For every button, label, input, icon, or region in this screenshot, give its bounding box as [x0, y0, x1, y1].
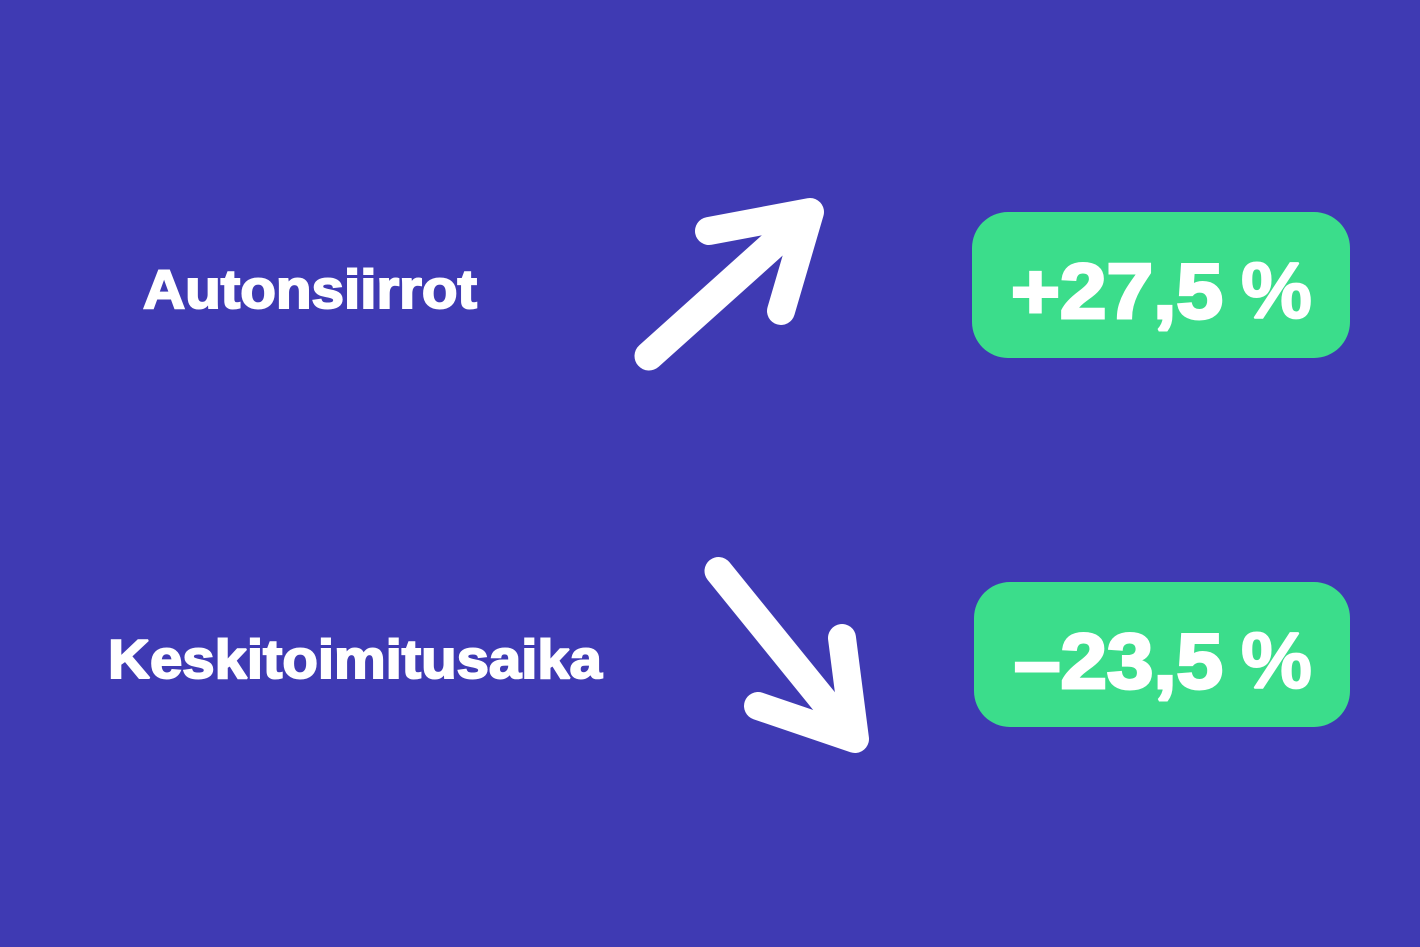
value: +27,5 %: % [1241, 246, 1312, 335]
value badge: up [972, 212, 1350, 358]
label: Autonsiirrot: Autonsiirrot [143, 258, 477, 320]
value badge: down [974, 582, 1350, 727]
value: –23,5 %: –23,5 [1014, 617, 1223, 705]
value: +27,5 %: +27,5 [1011, 247, 1223, 335]
badge background: down [974, 582, 1350, 727]
badge background: up [972, 212, 1350, 358]
arrow: down [718, 571, 855, 739]
value: –23,5 % [1014, 616, 1312, 705]
label: Keskitoimitusaika: Keskitoimitusaika [108, 628, 602, 690]
value: –23,5 %: % [1241, 616, 1312, 705]
arrow: up [649, 212, 810, 356]
value: +27,5 % [1011, 246, 1312, 335]
